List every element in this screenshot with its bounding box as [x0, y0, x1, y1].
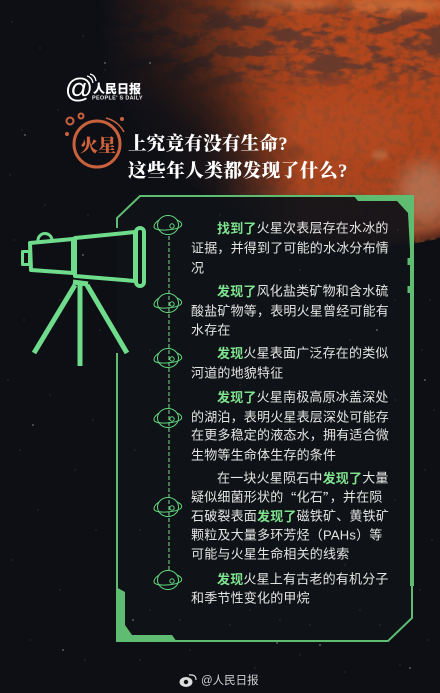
title: [128, 133, 348, 182]
icon: planet 1: [154, 216, 182, 234]
text block: finding 5: 颗粒及大量多环芳烃（PAHs）等: [191, 528, 382, 542]
text block: finding 4: [191, 390, 389, 462]
icon: planet 5: [154, 498, 182, 516]
text block: finding 3: [191, 346, 389, 380]
planet Mars: [112, 0, 440, 244]
text block: finding 3: 发现火星表面广泛存在的类似: [217, 346, 389, 360]
icon: planet 3: [154, 348, 182, 368]
icon: telescope: [22, 228, 144, 366]
text block: finding 2: 发现了风化盐类矿物和含水硫: [217, 284, 389, 298]
text block: finding 5: 石破裂表面发现了磁铁矿、黄铁矿: [191, 508, 389, 524]
text block: finding 4: 的湖泊，表明火星表层深处可能存: [191, 410, 389, 424]
text block: finding 1: 况: [191, 260, 204, 276]
icon: planet 6: [154, 570, 182, 590]
text block: finding 5: 可能与火星生命相关的线索: [191, 546, 349, 562]
text block: finding 5: [191, 470, 389, 562]
text block: finding 4: 在更多稳定的液态水，拥有适合微: [191, 428, 389, 442]
text block: finding 4: 生物等生命体生存的条件: [191, 448, 336, 462]
text block: finding 1: [191, 220, 389, 276]
footer: weibo attribution: [180, 673, 259, 687]
logo: People's Daily: [65, 72, 143, 104]
text block: finding 6: 发现火星上有古老的有机分子: [217, 572, 389, 586]
text block: finding 2: 酸盐矿物等，表明火星曾经可能有: [191, 304, 389, 318]
text block: finding 6: 和季节性变化的甲烷: [191, 590, 310, 606]
panel: findings frame: [116, 195, 414, 642]
title: 上究竟有没有生命?: [128, 133, 288, 155]
logo: People's Daily: @: [65, 72, 93, 104]
title badge: Mars: 火星: [80, 136, 116, 156]
icon: planet 2: [154, 294, 182, 312]
text block: finding 5: 疑似细菌形状的“化石”，并在陨: [191, 488, 383, 506]
text block: finding 2: [191, 284, 389, 338]
title badge: Mars: [65, 114, 124, 167]
text block: finding 1: 找到了火星次表层存在水冰的: [217, 220, 389, 236]
logo: People's Daily: 人民日报: [93, 81, 141, 96]
text block: finding 6: [191, 572, 389, 606]
logo: People's Daily: PEOPLE' S DAILY: [92, 96, 143, 102]
text block: finding 2: 水存在: [191, 322, 231, 338]
text block: finding 4: 发现了火星南极高原冰盖深处: [217, 390, 389, 404]
text block: finding 5: 在一块火星陨石中发现了大量: [217, 470, 389, 486]
text block: finding 1: 证据，并得到了可能的水冰分布情: [191, 240, 389, 256]
text block: finding 3: 河道的地貌特征: [191, 366, 283, 380]
footer: weibo attribution: @人民日报: [201, 673, 259, 687]
title: 这些年人类都发现了什么?: [128, 160, 348, 182]
timeline: [154, 216, 182, 590]
icon: planet 4: [154, 408, 182, 428]
